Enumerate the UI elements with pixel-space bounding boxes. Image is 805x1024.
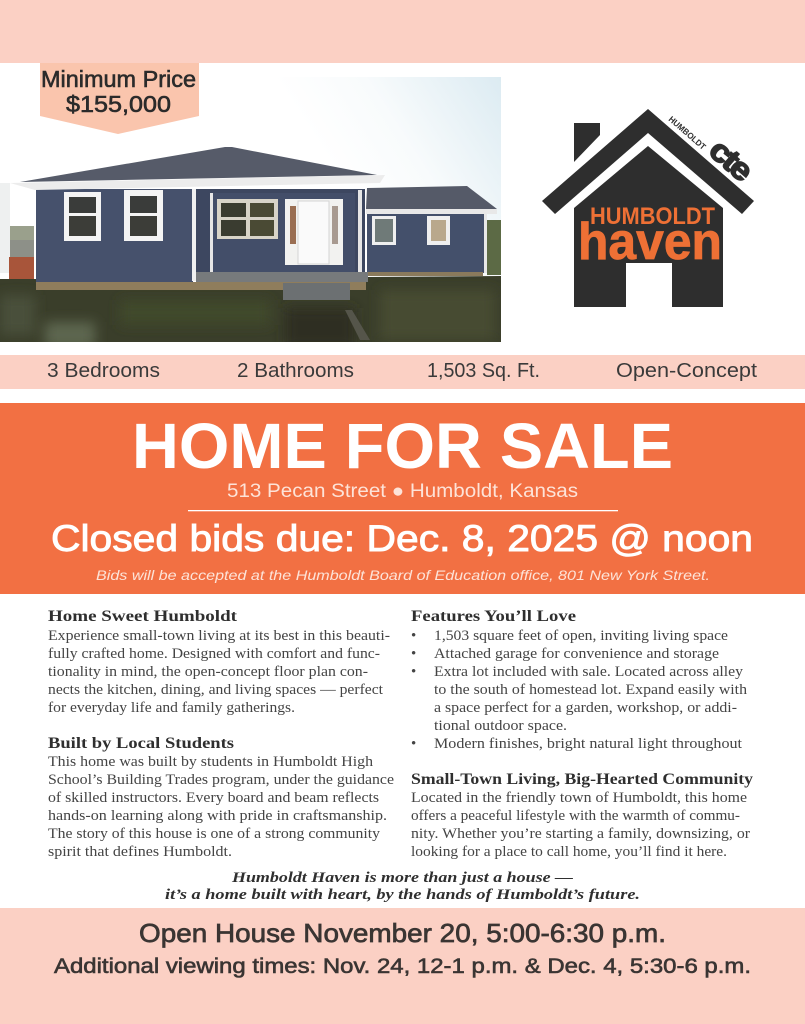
tagline: it’s a home built with heart, by the hands of Humboldt’s future. <box>165 887 640 903</box>
text: Features You'll Love: tional outdoor space. <box>434 718 567 734</box>
text: Small-Town Living: Located in the friendly town of Humboldt, this home <box>411 790 747 806</box>
feature strip: 3 Bedrooms <box>47 360 160 382</box>
orange sale banner <box>0 403 805 594</box>
text: Built by Local Students: hands-on learning along with pride in craftsmanship. <box>48 808 387 824</box>
text: Built by Local Students: spirit that defines Humboldt. <box>48 844 232 860</box>
feature strip: 2 Bathrooms <box>237 360 354 382</box>
price tag: Minimum Price <box>41 66 196 92</box>
text: Features You'll Love: • <box>411 646 416 662</box>
tagline <box>165 870 640 903</box>
text: Home Sweet Humboldt: for everyday life and family gatherings. <box>48 700 295 716</box>
text: Features You'll Love: to the south of homestead lot. Expand easily with <box>434 682 748 698</box>
address: 513 Pecan Street ● Humboldt, Kansas <box>227 481 578 502</box>
house photo <box>0 77 501 348</box>
open house band <box>0 908 805 1024</box>
lawn <box>0 276 501 342</box>
bid location: Bids will be accepted at the Humboldt Board of Education office, 801 New York Street. <box>96 567 710 583</box>
text: Features You'll Love: Features You’ll Love <box>411 608 576 625</box>
text: Features You'll Love: • <box>411 664 416 680</box>
text: Home Sweet Humboldt: Home Sweet Humboldt <box>48 608 238 625</box>
logo: Humboldt Haven house <box>542 109 760 307</box>
open house band: Additional viewing times: Nov. 24, 12-1 p.m. & Dec. 4, 5:30-6 p.m. <box>54 955 751 978</box>
logo: Humboldt Haven house: HUMBOLDT <box>667 114 709 152</box>
text: Features You'll Love: a space perfect for a garden, workshop, or addi- <box>434 700 737 716</box>
text: Features You'll Love: • <box>411 736 416 752</box>
text: Built by Local Students: School’s Building Trades program, under the guidance <box>48 772 394 788</box>
text: Home Sweet Humboldt: Experience small-town living at its best in this beauti- <box>48 628 390 644</box>
text: Built by Local Students: The story of this house is one of a strong community <box>48 826 381 842</box>
price tag <box>40 63 199 134</box>
feature strip <box>0 355 805 389</box>
text: Features You'll Love: Modern finishes, bright natural light throughout <box>434 736 743 752</box>
text: Features You'll Love: Attached garage for convenience and storage <box>434 646 719 662</box>
text: Built by Local Students: Built by Local Students <box>48 735 234 752</box>
text: Small-Town Living: nity. Whether you’re starting a family, downsizing, or <box>411 826 750 842</box>
text: Small-Town Living: offers a peaceful lifestyle with the warmth of commu- <box>411 808 740 824</box>
feature strip: 1,503 Sq. Ft. <box>427 360 540 382</box>
text: Built by Local Students: of skilled instructors. Every board and beam reflects <box>48 790 379 806</box>
bid deadline: Closed bids due: Dec. 8, 2025 @ noon <box>51 518 753 559</box>
text: Built by Local Students <box>48 735 394 860</box>
feature strip: Open-Concept <box>616 360 757 382</box>
logo: Humboldt Haven house: HUMBOLDT <box>590 203 715 230</box>
text: Small-Town Living: looking for a place to call home, you’ll find it here. <box>411 844 727 860</box>
logo: Humboldt Haven house: cte <box>702 132 760 188</box>
banner title: HOME FOR SALE <box>132 410 673 482</box>
text: Features You'll Love: • <box>411 628 416 644</box>
text: Features You'll Love: Extra lot included with sale. Located across alley <box>434 664 744 680</box>
top band <box>0 0 805 63</box>
text: Small-Town Living <box>411 771 753 860</box>
text: Small-Town Living: Small-Town Living, Big-Hearted Community <box>411 771 753 788</box>
text: Built by Local Students: This home was built by students in Humboldt High <box>48 754 374 770</box>
text: Features You'll Love <box>411 608 748 752</box>
tagline: Humboldt Haven is more than just a house — <box>231 870 573 886</box>
text: Home Sweet Humboldt: tionality in mind, the open-concept floor plan con- <box>48 664 368 680</box>
text: Home Sweet Humboldt: nects the kitchen, dining, and living spaces — perfect <box>48 682 384 698</box>
logo: Humboldt Haven house: haven <box>578 213 722 271</box>
text: Home Sweet Humboldt <box>48 608 390 716</box>
text: Home Sweet Humboldt: fully crafted home. Designed with comfort and func- <box>48 646 380 662</box>
open house band: Open House November 20, 5:00-6:30 p.m. <box>139 918 666 948</box>
price tag: $155,000 <box>66 91 171 117</box>
text: Features You'll Love: 1,503 square feet of open, inviting living space <box>434 628 728 644</box>
